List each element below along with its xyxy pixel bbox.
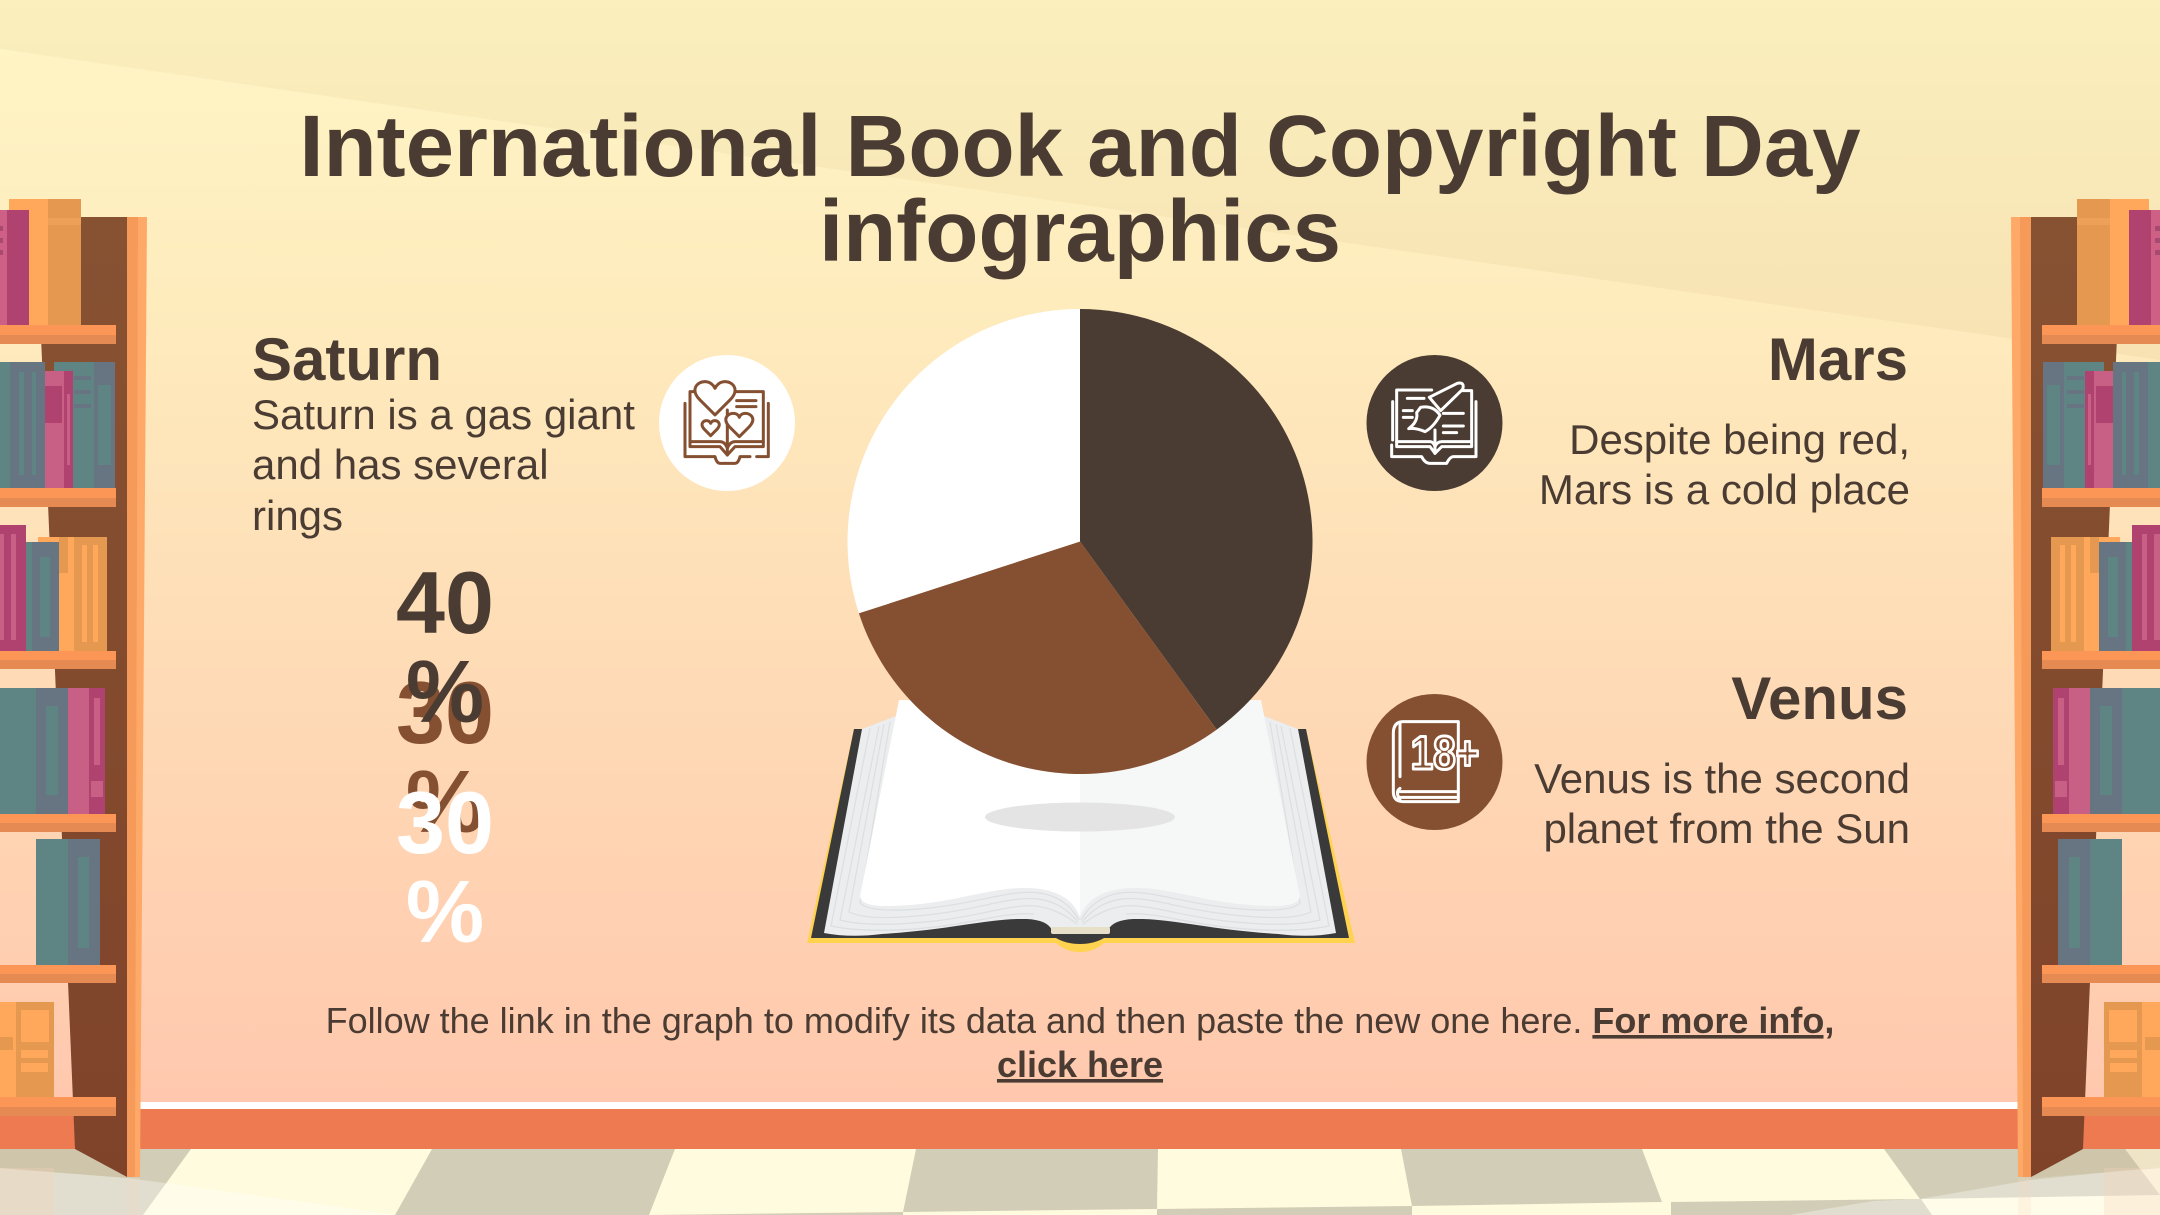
text: Saturn description: rings xyxy=(252,492,343,539)
books row 4 xyxy=(0,688,105,814)
page edge lines xyxy=(831,722,1329,930)
books row 2 xyxy=(0,362,115,488)
text: Mars description: Mars is a cold place xyxy=(1539,466,1910,513)
icon: book with paintbrush xyxy=(1366,355,1502,491)
title: infographics xyxy=(819,183,1341,280)
percentage: 30% brown: % xyxy=(406,752,484,851)
shelf boards xyxy=(0,325,116,1116)
footer note: click here xyxy=(997,1044,1163,1085)
page stacks xyxy=(824,716,1336,936)
icon: book with hearts xyxy=(659,355,795,491)
percentage: 30% white: % xyxy=(406,862,484,961)
heading: Venus: Venus xyxy=(1731,665,1908,732)
shelf side panel xyxy=(127,217,147,1177)
percentage: 30% white: 30 xyxy=(396,773,494,872)
percentage: 40% dark: % xyxy=(406,642,484,741)
slice: 30% white xyxy=(848,309,1080,613)
icon: adult book 18+ xyxy=(1366,694,1502,830)
book cover xyxy=(807,729,1355,952)
open book illustration xyxy=(807,700,1355,952)
spine ribbon xyxy=(1051,927,1110,934)
books row 1 xyxy=(0,199,81,325)
heading: Mars: Mars xyxy=(1768,326,1908,393)
percentage: 30% brown: 30 xyxy=(396,663,494,762)
text: Saturn description: Saturn is a gas giant xyxy=(252,391,635,438)
icon: adult book 18+: 18+ xyxy=(1411,727,1479,780)
percentage: 40% dark: 40 xyxy=(396,553,494,652)
footer note: Follow the link in the graph to modify its data and then paste the new one here. For more info, xyxy=(326,1000,1834,1041)
shadow under pie xyxy=(985,802,1175,832)
pie chart xyxy=(848,309,1313,774)
title: International Book and Copyright Day xyxy=(299,98,1861,195)
text: Venus description: Venus is the second xyxy=(1534,755,1910,802)
books row 5 xyxy=(36,839,100,965)
wall skirting xyxy=(0,1102,2160,1149)
text: Venus description: planet from the Sun xyxy=(1543,805,1910,852)
shelf back panel xyxy=(36,217,127,1177)
shelf floor shadow and reflection xyxy=(0,1149,140,1215)
right page xyxy=(1080,700,1300,917)
left page xyxy=(860,700,1080,917)
slice: 30% xyxy=(859,542,1217,774)
text: Mars description: Despite being red, xyxy=(1569,416,1910,463)
text: Saturn description: and has several xyxy=(252,441,549,488)
books row 6 xyxy=(0,1002,54,1097)
checkered floor xyxy=(0,1149,2160,1215)
left bookshelf xyxy=(0,199,147,1215)
right bookshelf xyxy=(2011,199,2160,1215)
books row 3 xyxy=(0,525,107,651)
slice: 40% xyxy=(1080,309,1313,730)
heading: Saturn: Saturn xyxy=(252,326,442,393)
